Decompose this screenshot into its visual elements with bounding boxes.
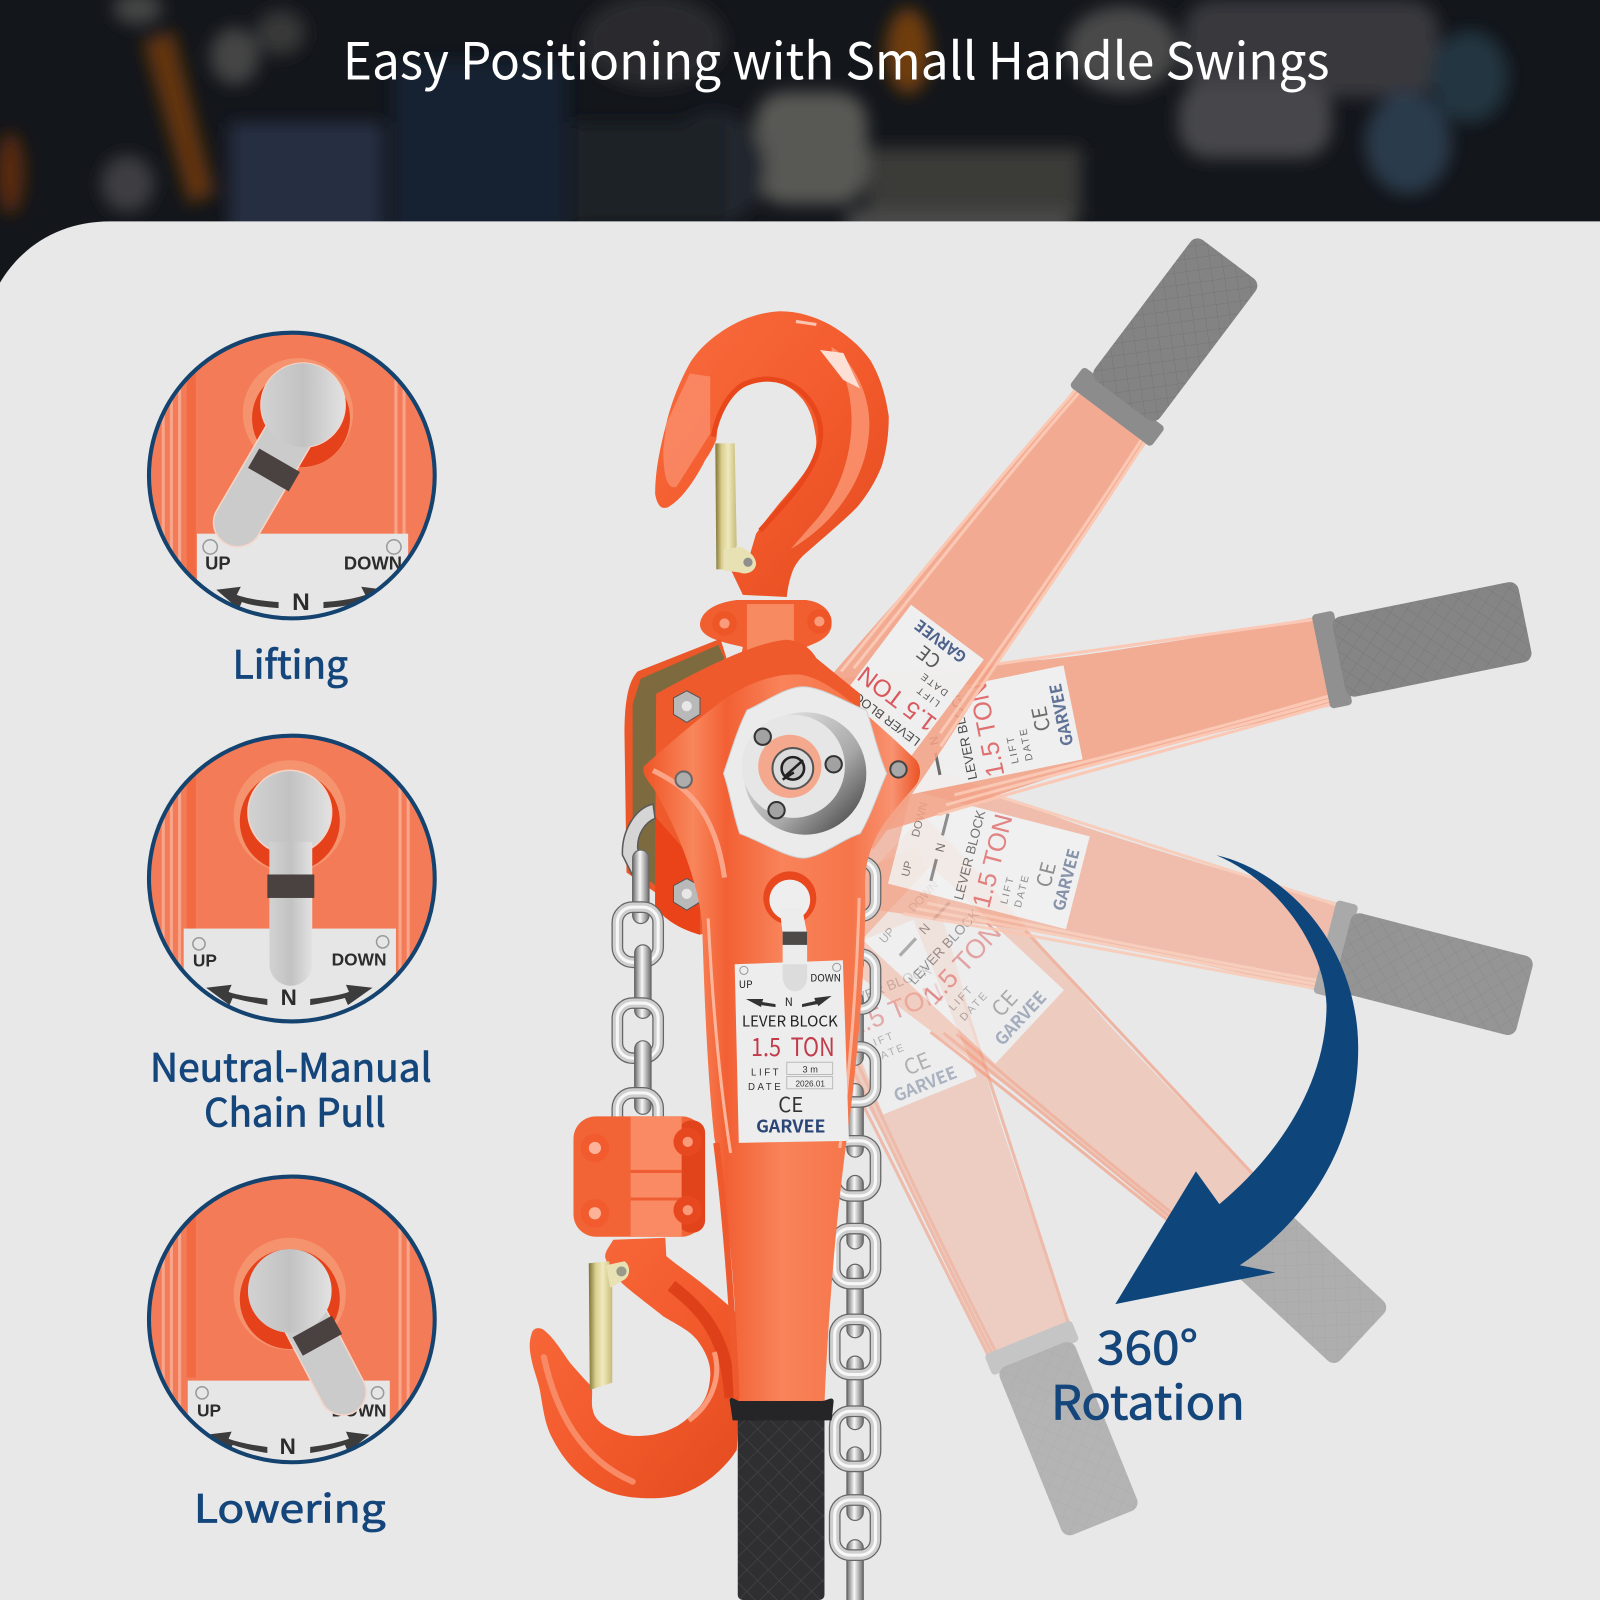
main handle nameplate: LIFT (751, 1068, 781, 1079)
ghost handle: right upper position: UP (906, 765, 921, 783)
ghost handle: right lower position: GARVEE (1046, 846, 1085, 913)
ghost handle: right lower position: LIFT (999, 874, 1017, 905)
title: Easy Positioning with Small Handle Swings (343, 21, 1330, 95)
ghost handle: right upper position: DATE (1018, 726, 1036, 762)
label: lifting: Lifting (233, 635, 348, 691)
ghost handle: right upper position: DOWN (894, 706, 913, 743)
ghost handle: lower right position: GARVEE (988, 985, 1051, 1050)
ghost handle: right lower position: DOWN (910, 801, 930, 838)
lower hook (530, 1238, 745, 1498)
ghost handle: right upper position: CE (1022, 704, 1056, 735)
ghost handle: right upper position: N (926, 735, 942, 746)
main handle nameplate: 2026.01 (795, 1080, 825, 1089)
circle ring: neutral (149, 736, 435, 1021)
detail circle: neutral: DOWN (332, 949, 387, 969)
circle ring: lifting (149, 333, 435, 618)
main handle nameplate: N (785, 994, 793, 1010)
main handle nameplate (735, 960, 849, 1143)
label: neutral manual chain pull: Chain Pull (204, 1083, 386, 1139)
ghost handle: lower position: GARVEE (889, 1059, 960, 1107)
detail circle: lowering: DOWN (332, 1400, 387, 1420)
direction keyhole (763, 871, 816, 991)
ghost handle: right lower position (783, 733, 1545, 1077)
main handle nameplate: LEVER BLOCK (742, 1011, 838, 1032)
ghost handle: lower right position: CE (984, 983, 1024, 1023)
header background (0, 0, 1600, 306)
ghost handle: top position (759, 216, 1285, 849)
ghost handle: top position: 1.5 TON (853, 660, 942, 737)
right chain (835, 861, 876, 1600)
ghost handle: lower position: CE (899, 1044, 935, 1082)
ghost handle: right upper position (787, 540, 1541, 847)
detail circle: lifting: N (292, 589, 310, 616)
label: neutral manual chain pull: Neutral-Manual (150, 1038, 432, 1094)
main handle nameplate: DOWN (810, 970, 841, 985)
main handle nameplate: 1.5 TON (751, 1027, 835, 1064)
detail circle: neutral: UP (193, 950, 217, 970)
ghost handle: lower right position (812, 816, 1418, 1397)
detail circle: neutral (151, 738, 433, 1006)
ghost handle: lower right position: UP (877, 925, 898, 946)
ghost handle: top position: LEVER BLOCK (844, 684, 923, 749)
ghost handle: lower right position: DATE (958, 989, 991, 1024)
left chain (617, 804, 658, 1148)
ghost handle: right lower position: LEVER BLOCK (951, 808, 988, 901)
ghost handle: lower position: LEVER BLOCK (838, 961, 934, 1012)
main handle nameplate: CE (778, 1088, 803, 1118)
rotation label: Rotation (1051, 1365, 1245, 1433)
rotation label: 360° (1097, 1310, 1198, 1378)
detail circle: lowering (151, 1178, 433, 1454)
detail circle: lifting: DOWN (344, 552, 402, 573)
ghost handle: top position: GARVEE (910, 615, 971, 668)
ghost handle: lower right position: N (916, 920, 933, 937)
ghost handle: lower right position: LEVER BLOCK (905, 905, 983, 988)
main handle nameplate: DATE (748, 1082, 783, 1093)
ghost handle: right upper position: LIFT (1005, 734, 1022, 765)
ghost handle: lower position: DATE (870, 1041, 908, 1066)
ghost handle: right upper position: GARVEE (1042, 682, 1078, 748)
rotation arrow (1115, 855, 1358, 1304)
silver hub disc (676, 687, 907, 858)
ghost handle: top position: DATE (918, 669, 951, 698)
detail circle: lowering: N (280, 1434, 296, 1459)
lower block (573, 1116, 705, 1237)
ghost handle: top position: LIFT (914, 683, 942, 709)
ghost handle: lower position: 1.5 TON (843, 977, 947, 1042)
ghost handle: right lower position: CE (1027, 858, 1062, 890)
ghost handle: right lower position: DATE (1013, 873, 1032, 909)
ghost handle: right lower position: UP (900, 860, 915, 878)
rotation label (1051, 1310, 1245, 1433)
main handle nameplate: UP (739, 976, 753, 991)
ghost handle: right lower position: N (933, 842, 948, 854)
ghost handle: lower right position: DOWN (906, 879, 941, 915)
ghost handle: lower position: LIFT (864, 1029, 897, 1052)
ghost handle: right upper position: LEVER BLOCK (947, 688, 980, 781)
main handle nameplate: 3 m (803, 1064, 818, 1074)
ghost handle: top position: CE (910, 640, 946, 676)
detail circle: neutral: N (281, 985, 297, 1010)
grip (730, 1398, 834, 1600)
detail circle: lifting (151, 334, 433, 610)
main lever handle (643, 674, 920, 1403)
ghost handle: lower position (766, 847, 1178, 1553)
ghost handle: lower right position: 1.5 TON (917, 917, 1007, 1011)
circle ring: lowering (149, 1177, 435, 1462)
ghost handle: right upper position: 1.5 TON (964, 680, 1010, 779)
detail circle: lowering: UP (197, 1400, 221, 1420)
ghost handle: right lower position: 1.5 TON (968, 811, 1018, 911)
main handle nameplate: GARVEE (756, 1113, 826, 1138)
swivel collar (700, 600, 832, 679)
back plate (624, 639, 860, 935)
label: lowering: Lowering (194, 1478, 386, 1534)
top hook (655, 311, 889, 597)
ghost handle: lower right position: LIFT (947, 983, 976, 1013)
label: neutral manual chain pull (150, 1038, 432, 1139)
detail circle: lifting: UP (205, 552, 231, 573)
